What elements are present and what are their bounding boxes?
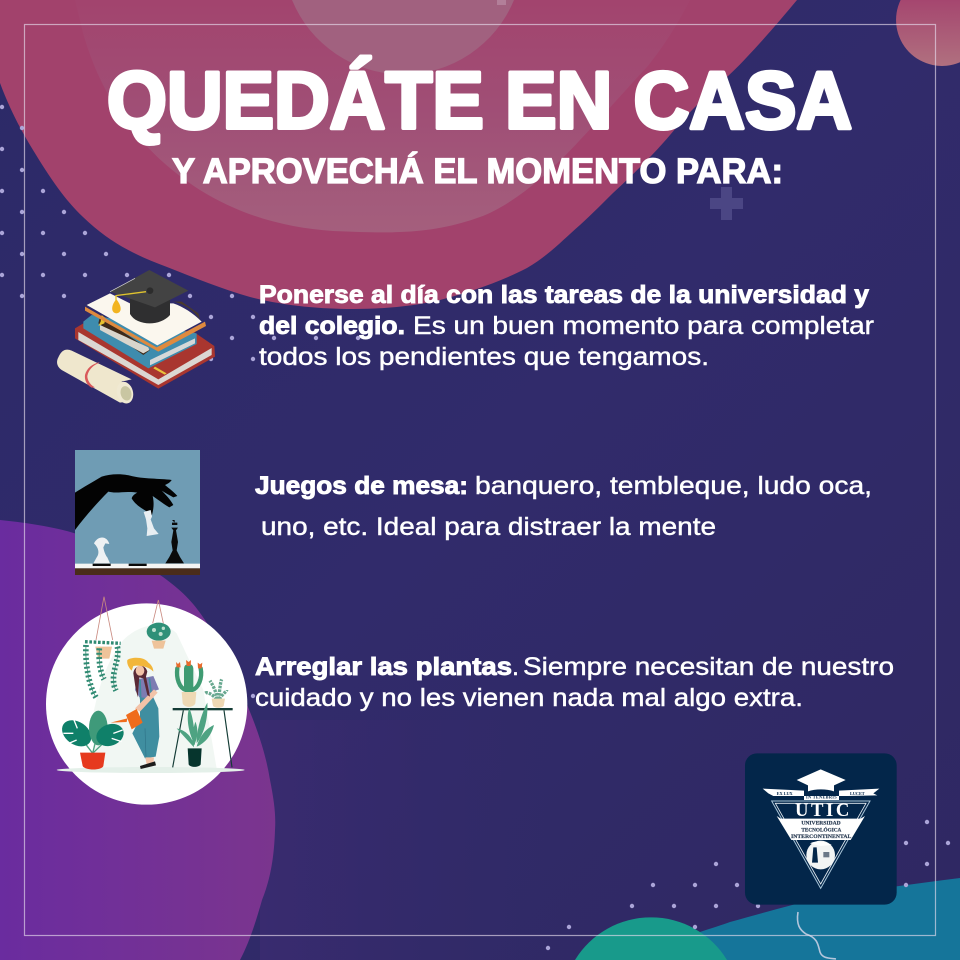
graduation cap emblem [797,769,846,791]
chess background [75,450,200,575]
university name band: UNIVERSIDAD [801,821,841,827]
title: QUEDÁTE EN CASA [107,56,852,146]
background shape: purple blob [0,520,275,960]
monstera plant [57,711,127,769]
white rook [144,510,159,536]
text block: plantas: cuidado y no les vienen nada mal algo extra. [255,684,803,712]
cactus [176,660,202,707]
woman [111,658,159,769]
overalls [132,697,159,758]
text block: plantas: . [512,653,519,681]
blue book [83,315,197,368]
white circle [46,603,247,805]
motto ribbon: EX LUX [777,791,794,796]
hanging fern [85,597,121,697]
logo background [745,753,897,905]
graduation cap [130,297,170,323]
university name band [777,816,865,840]
text block: tareas: Ponerse al día con las tareas de la universidad y [259,281,869,309]
background shape: green circle [575,917,727,960]
dark book [98,317,150,355]
icon: chess hand [75,450,200,575]
subtitle: Y APROVECHÁ EL MOMENTO PARA: [172,151,783,191]
motto ribbon [763,789,879,800]
lighthouse emblem [806,841,835,869]
motto ribbon: IN TENEBRIS [806,794,837,799]
ground [57,767,245,773]
logo: UTIC [745,753,897,905]
diploma [57,350,136,405]
background shape: pink blob [0,0,797,309]
text block: juegos de mesa: banquero, tembleque, ludo oca, [475,472,872,500]
hand silhouette [75,474,177,530]
background shape: teal wave [680,878,960,960]
hair and face [133,666,150,697]
arm [135,689,158,712]
black king [165,520,184,563]
text block: plantas [255,653,894,712]
plant table [173,708,233,767]
decorative plus sign [710,187,743,220]
text block: tareas: todos los pendientes que tengamos. [259,343,709,371]
UTIC letters: UTIC [795,800,849,821]
text block: plantas: Siempre necesitan de nuestro [523,653,894,681]
text block: tareas: del colegio. [259,312,405,340]
text block: juegos de mesa [255,472,872,541]
text block: tareas: Es un buen momento para completar [413,312,874,340]
icon: woman watering plants [46,597,247,805]
motto ribbon: LUCET [850,791,865,796]
legs and shoes [145,757,154,765]
hanging round plant [147,600,171,649]
text block: tareas [259,281,874,371]
chess board edge [75,564,200,568]
hat [127,658,153,672]
small potted plant [205,679,227,708]
open book [85,307,206,352]
icon: books, graduation cap and diploma [57,270,215,405]
text block: juegos de mesa: Juegos de mesa: [255,472,468,500]
triangle outline [772,801,870,888]
floor plant [177,703,214,767]
red book [75,323,215,389]
squiggle line [797,912,836,959]
university name band: INTERCONTINENTAL [791,834,852,840]
university name band: TECNOLÓGICA [801,825,842,833]
pale background shape [93,625,217,769]
background shape: lighter ellipse [75,0,690,232]
white knight [93,538,110,563]
shirt [135,676,159,698]
text block: juegos de mesa: uno, etc. Ideal para distraer la mente [261,513,716,541]
watering can [126,709,143,729]
text block: plantas: Arreglar las plantas [255,653,512,681]
background shape: top right circle [896,0,960,66]
background shape: inner circle [292,0,514,74]
